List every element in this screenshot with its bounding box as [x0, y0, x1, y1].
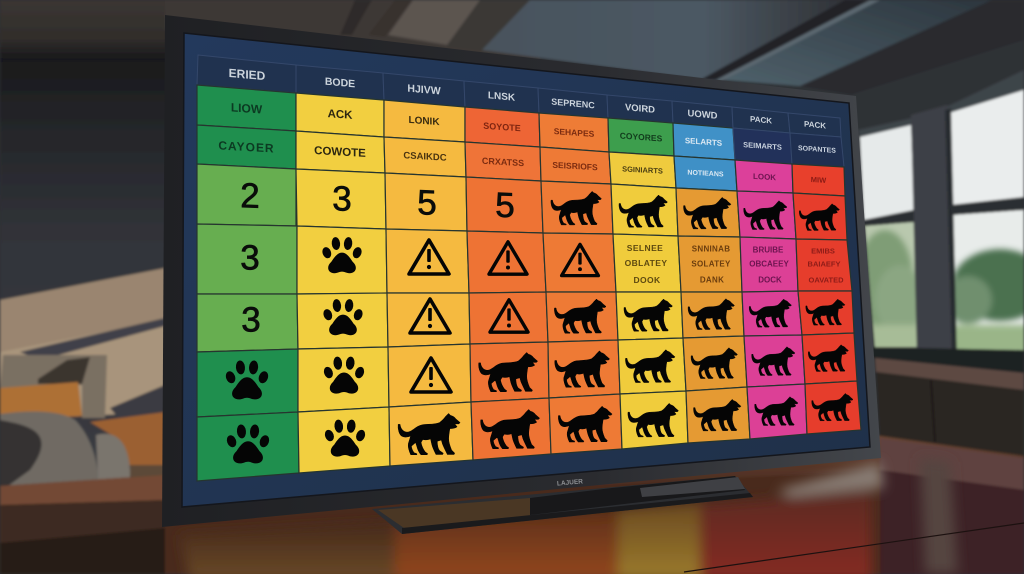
cell: MIW: [792, 164, 845, 196]
cell: paw yellow: [297, 226, 387, 294]
cell: LONIK: [384, 100, 465, 142]
cell: number 2: 2: [240, 176, 260, 216]
cell: text amber: DANK: [700, 276, 724, 284]
cell: dog pink: [744, 335, 805, 387]
cell: MIW: MIW: [811, 175, 827, 185]
monitor brand label: LAJUER: [557, 478, 584, 488]
header: LNSK: LNSK: [488, 90, 516, 104]
cell: paw dark green: [197, 412, 299, 481]
header: HJIVW: [383, 73, 465, 107]
screen panel: [182, 33, 870, 507]
cell: LOOK: [735, 160, 793, 193]
cell: dog amber: [681, 292, 744, 338]
row 4: [197, 224, 852, 294]
row 3: [197, 164, 847, 240]
header: VOIRD: VOIRD: [625, 102, 655, 116]
cell: COYORES: [608, 118, 674, 156]
cell: SGINIARTS: SGINIARTS: [622, 164, 663, 176]
cell: warning orange 2: [543, 233, 616, 292]
cell: NOTIEANS: NOTIEANS: [687, 169, 724, 179]
cell: LOOK: LOOK: [753, 172, 776, 182]
cell: ACK: [296, 93, 384, 137]
cell: dog yellow: [620, 391, 688, 449]
header: ERIED: [197, 55, 296, 93]
cell: SOYOTE: SOYOTE: [483, 121, 521, 133]
cell: text yellow: SELNEE: [627, 243, 663, 253]
cell: dog red: [793, 193, 847, 240]
cell: NOTIEANS: [674, 156, 737, 191]
cell: text red: [796, 239, 852, 291]
cell: text red: EMIBS: [811, 246, 835, 256]
row 1 labels: [197, 85, 844, 167]
cell: dog pink: [737, 191, 796, 239]
cell: number 5 orange: 5: [495, 186, 515, 225]
header: SEPRENC: [538, 88, 608, 118]
header: PACK: [732, 107, 790, 133]
cell: text red: OAVATED: [808, 276, 844, 284]
cell: dog orange 2: [548, 340, 620, 398]
header: BODE: [296, 65, 384, 100]
header: VOIRD: [607, 95, 673, 123]
monitor stand base: [372, 476, 753, 534]
cell: warning orange: [469, 292, 548, 344]
cell: CAYOER: CAYOER: [218, 138, 275, 156]
cell: dog yellow: [611, 184, 678, 236]
cell: SGINIARTS: [609, 152, 676, 188]
header: PACK right: PACK: [804, 120, 826, 130]
cell: COYORES: COYORES: [620, 130, 663, 144]
monitor bezel: [162, 15, 881, 527]
cell: number 3 green lower: [197, 294, 298, 352]
cell: text yellow: OBLATEY: [625, 258, 667, 268]
cell: text amber: [678, 236, 742, 292]
cell: dog orange: [546, 292, 618, 342]
cell: dog orange: [471, 398, 551, 460]
cell: dog red: [798, 291, 854, 335]
table: [0, 436, 1024, 574]
cell: dog amber: [389, 402, 473, 466]
row 2 labels: [197, 125, 845, 196]
cell: COWOTE: [296, 131, 385, 173]
table reflections of the screen: [180, 458, 958, 574]
cell: number 5: 5: [417, 183, 437, 223]
cell: LIOW: [197, 85, 296, 131]
row 6: [197, 333, 857, 417]
cell: dog pink: [747, 384, 807, 439]
cell: text red: BAIAEFY: [808, 260, 840, 268]
cell: text pink: DOCK: [758, 276, 782, 284]
cell: paw dark green: [197, 349, 298, 417]
header: LNSK: [464, 81, 539, 113]
cell: dog pink: [742, 291, 802, 336]
cell: text pink: BRUIBE: [753, 246, 784, 254]
cell: text yellow: DOOK: [633, 275, 661, 285]
header: PACK right: [788, 113, 841, 137]
cell: text amber: SOLATEY: [691, 260, 731, 268]
cell: dog yellow: [618, 338, 686, 394]
cell: SEIMARTS: SEIMARTS: [743, 140, 782, 152]
cell: text yellow: [613, 234, 681, 292]
cell: warning amber: [387, 293, 470, 347]
cell: number 2: [197, 164, 296, 226]
cell: text amber: SNNINAB: [692, 244, 730, 254]
cell: SEHAPES: [539, 113, 609, 152]
cell: dog amber: [683, 336, 747, 391]
cell: dog yellow: [616, 292, 683, 340]
cell: CRXATSS: [465, 142, 541, 181]
header: UOWD: UOWD: [687, 108, 718, 122]
cell: warning amber: [388, 344, 471, 407]
cell: number 3 green: [197, 224, 297, 294]
header: ERIED: ERIED: [229, 66, 266, 83]
cell: SOPANTES: [790, 133, 844, 167]
cell: number 3: [296, 169, 386, 229]
header: SEPRENC: SEPRENC: [551, 97, 595, 110]
cell: dog orange: [541, 181, 613, 234]
header: PACK: PACK: [750, 115, 772, 125]
header row: [197, 55, 841, 137]
cell: SEHAPES: SEHAPES: [554, 126, 595, 139]
cell: paw yellow: [297, 293, 388, 349]
windows: [857, 90, 1024, 362]
header: HJIVW: HJIVW: [407, 83, 441, 97]
row 5: [197, 291, 854, 352]
cell: number 5 orange: [466, 177, 543, 233]
cell: dog red: [805, 381, 861, 434]
cell: text pink: OBCAEEY: [749, 260, 789, 268]
cell: SELARTS: SELARTS: [685, 136, 723, 148]
cell: paw yellow: [298, 407, 390, 473]
cell: CRXATSS: CRXATSS: [482, 156, 524, 168]
cell: COWOTE: COWOTE: [314, 145, 366, 160]
cell: SELARTS: [673, 123, 735, 160]
cell: ACK: ACK: [328, 108, 353, 122]
cell: SOPANTES: SOPANTES: [798, 145, 836, 155]
cell: number 3 green: 3: [240, 238, 260, 278]
cell: CAYOER: [197, 125, 296, 169]
cell: text pink: [740, 237, 798, 292]
cell: number 3: 3: [332, 179, 352, 219]
cell: LONIK: LONIK: [408, 115, 440, 128]
cell: LIOW: LIOW: [231, 100, 263, 117]
header: UOWD: [672, 101, 733, 128]
cell: paw yellow: [298, 347, 389, 412]
cell: SEIMARTS: [733, 128, 792, 164]
cell: SOYOTE: [465, 107, 540, 147]
cell: dog orange 2: [549, 394, 622, 454]
row 7: [197, 381, 861, 481]
cell: dog amber: [686, 387, 750, 443]
cell: CSAIKDC: CSAIKDC: [403, 150, 447, 164]
cell: SEISRIOFS: [540, 147, 611, 184]
cell: warning amber: [386, 229, 469, 293]
cell: number 5: [385, 173, 467, 231]
header: BODE: BODE: [325, 76, 355, 90]
cell: CSAIKDC: [384, 137, 466, 177]
cell: dog orange: [470, 342, 549, 402]
cell: dog amber: [676, 188, 740, 237]
cell: SEISRIOFS: SEISRIOFS: [552, 160, 598, 172]
cell: dog red: [802, 333, 857, 384]
cell: warning orange: [467, 231, 546, 293]
risk grid: [197, 55, 861, 481]
cell: number 3 green lower: 3: [241, 300, 261, 340]
